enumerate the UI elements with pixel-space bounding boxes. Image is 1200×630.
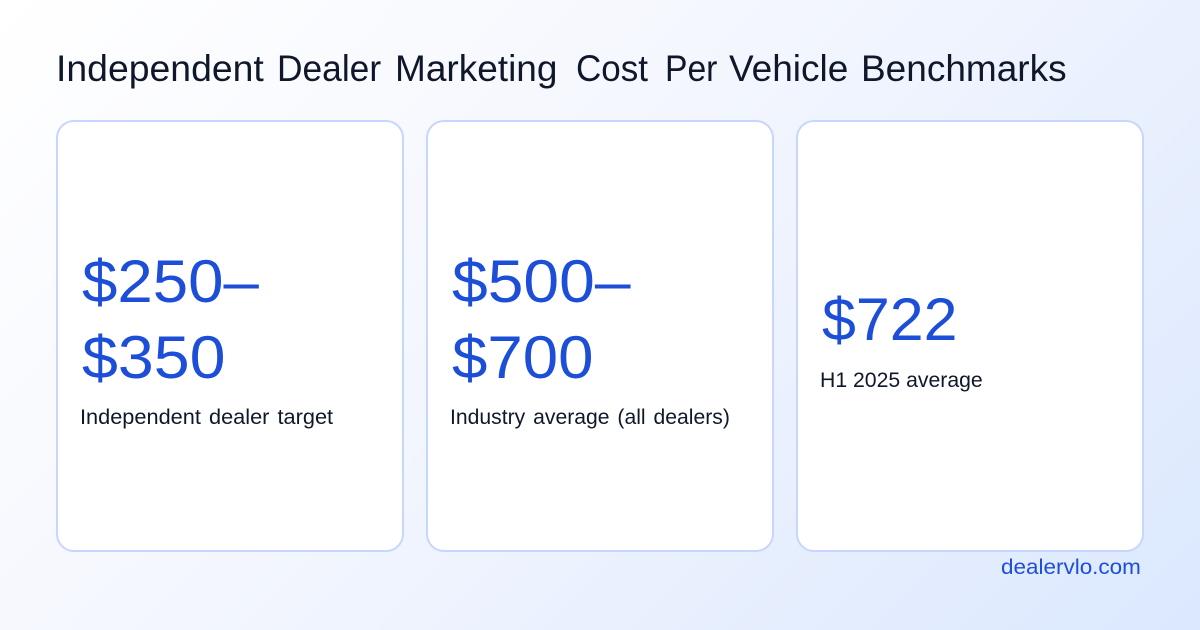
title: Dealer: [277, 48, 381, 89]
label: independent dealer target: Independent dealer target: [80, 406, 333, 429]
panel: industry average: [426, 120, 774, 552]
title: Vehicle: [729, 48, 848, 89]
stat: $250–$350: $250–: [82, 248, 259, 315]
stat: $250–$350: [82, 248, 259, 391]
stat: $250–$350: $350: [82, 324, 225, 391]
title: Cost: [576, 48, 648, 89]
stat: $500–$700: $500–: [452, 248, 631, 315]
title: Benchmarks: [861, 48, 1067, 89]
title: Per: [665, 48, 717, 89]
stat: $722: $722: [822, 286, 957, 353]
panel: independent dealer target: [56, 120, 404, 552]
stat: $500–$700: [452, 248, 631, 391]
panel: H1 2025 average: [796, 120, 1144, 552]
stat: $500–$700: $700: [452, 324, 593, 391]
label: H1 2025 average: H1 2025 average: [820, 369, 983, 392]
title: Independent: [56, 48, 264, 89]
title: [56, 48, 1067, 89]
label: industry average: Industry average (all dealers): [450, 406, 730, 429]
title: Marketing: [395, 48, 557, 89]
footer brand: dealervlo.com: [1001, 556, 1141, 579]
